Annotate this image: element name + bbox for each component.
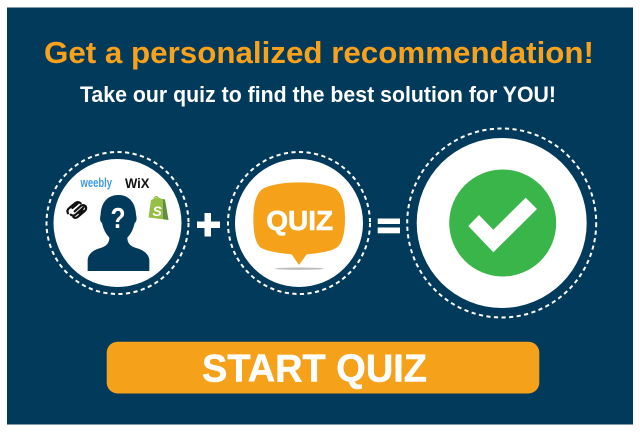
bubble label: QUIZ — [266, 205, 333, 236]
white disc — [417, 138, 587, 308]
speech bubble shadow — [275, 268, 324, 270]
subtitle: Take our quiz to find the best solution for YOU! — [80, 82, 556, 107]
plus sign — [197, 213, 220, 236]
button: start quiz — [107, 342, 539, 394]
icon: question mark: ? — [110, 203, 126, 235]
white disc — [54, 159, 182, 287]
panel: person and website builders — [46, 152, 188, 294]
logo: weebly: weebly — [80, 175, 113, 190]
dashed ring — [228, 152, 370, 294]
logo: shopify bag: S — [152, 203, 162, 219]
logo: squarespace — [67, 202, 86, 218]
button: start quiz: START QUIZ — [202, 348, 427, 390]
logo: wix: WiX — [125, 175, 150, 191]
icon: person silhouette — [88, 195, 149, 271]
white disc — [235, 159, 363, 287]
equals sign — [378, 218, 400, 233]
title: Get a personalized recommendation! — [44, 35, 594, 70]
logo: shopify bag — [148, 196, 168, 220]
icon: speech bubble — [253, 182, 345, 265]
dashed ring — [46, 152, 188, 294]
dashed ring — [407, 128, 596, 318]
icon: check mark — [468, 198, 537, 252]
panel: result — [407, 128, 596, 318]
icon: green circle — [449, 170, 556, 276]
panel: quiz — [228, 152, 370, 294]
